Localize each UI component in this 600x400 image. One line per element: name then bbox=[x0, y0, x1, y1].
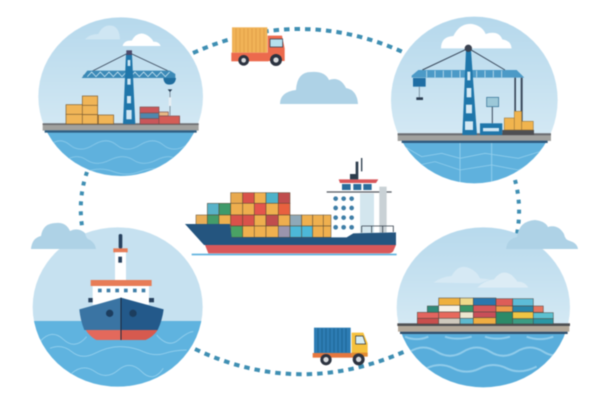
dotted route: left arc bbox=[81, 172, 87, 226]
dotted route: right arc bbox=[515, 180, 519, 234]
ship superstructure bbox=[327, 158, 393, 238]
cloud: left bbox=[31, 223, 96, 249]
panel: bottom-right loaded port bbox=[395, 220, 572, 396]
truck: blue cargo truck bbox=[313, 328, 368, 365]
panel: bottom-left ship at sea bbox=[32, 220, 205, 393]
panel: top-right port with crane bbox=[390, 15, 560, 185]
dotted route: top arc bbox=[193, 29, 405, 53]
dotted route: bottom arc bbox=[195, 349, 408, 374]
cloud: center bbox=[280, 72, 358, 104]
containers bbox=[196, 193, 331, 237]
center container ship bbox=[185, 158, 397, 255]
panel: top-left port with crane bbox=[37, 13, 207, 182]
cloud: right bbox=[506, 220, 578, 249]
truck: orange cargo truck bbox=[231, 27, 285, 66]
ship hull bbox=[185, 224, 397, 255]
